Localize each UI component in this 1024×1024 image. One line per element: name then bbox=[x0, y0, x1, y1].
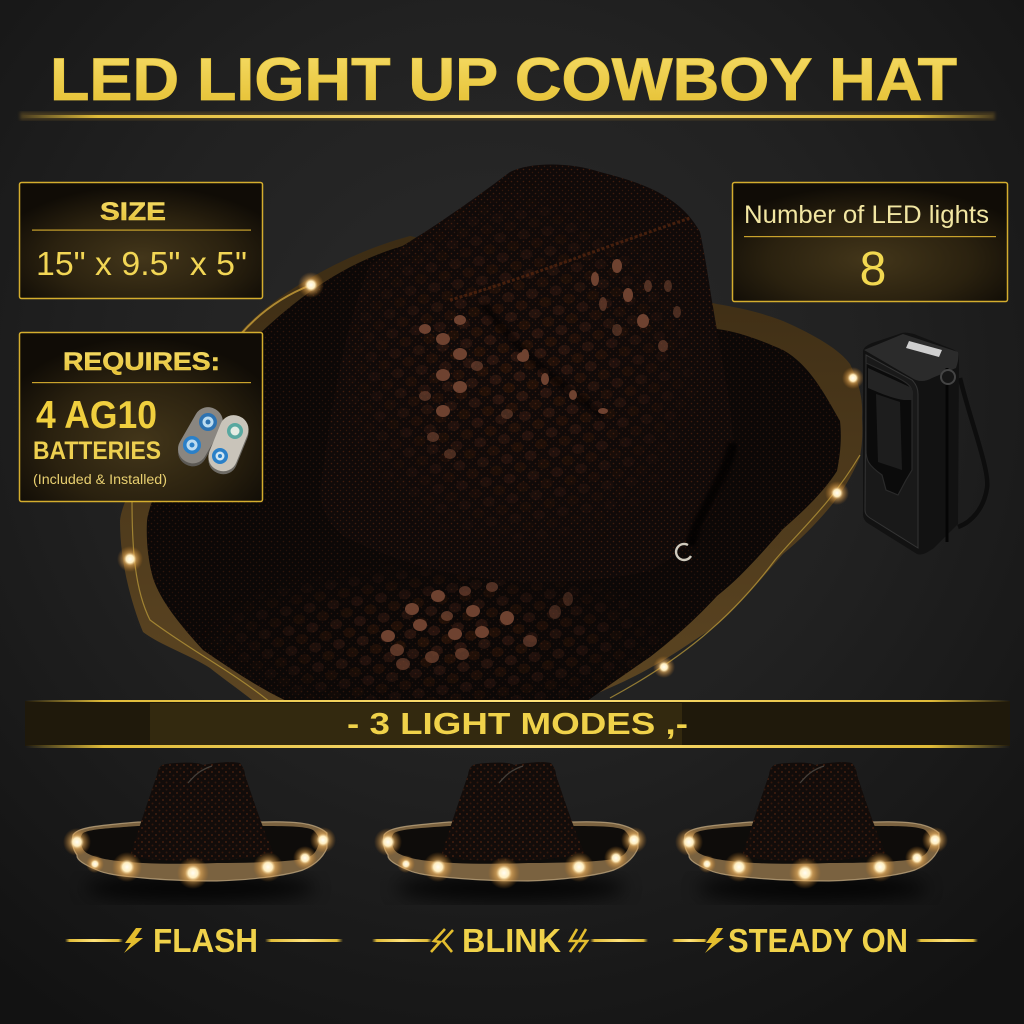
mode: blink hat bbox=[374, 762, 647, 902]
mode label: blink bbox=[372, 922, 648, 959]
mode label: blink: BLINK bbox=[462, 922, 561, 959]
panel: size bbox=[20, 182, 262, 298]
heading: size: SIZE bbox=[100, 198, 166, 226]
panel: requires bbox=[20, 332, 262, 502]
mode label: steady on: STEADY ON bbox=[728, 922, 908, 959]
mode: steady on hat bbox=[675, 762, 948, 902]
battery label: BATTERIES bbox=[33, 437, 161, 465]
hat brim bbox=[120, 236, 862, 704]
panel: number of LED lights bbox=[732, 182, 1008, 302]
bright sequins bbox=[381, 259, 681, 670]
icon: bolts right bbox=[570, 929, 587, 952]
hat crown bbox=[320, 164, 733, 582]
mode label: steady on bbox=[672, 922, 978, 959]
pack cable bbox=[958, 378, 987, 527]
mode label: flash bbox=[65, 922, 343, 959]
LED lights on main hat bbox=[117, 272, 864, 678]
battery count: 4 AG10 bbox=[36, 394, 157, 437]
icon: batteries bbox=[173, 402, 253, 479]
heading: 3 light modes: - 3 LIGHT MODES ,- bbox=[347, 706, 688, 741]
banner: 3 light modes bbox=[25, 700, 1010, 748]
hat eyelet bbox=[676, 544, 691, 560]
heading: number of LED lights: Number of LED lights bbox=[744, 201, 989, 229]
mode label: flash: FLASH bbox=[153, 922, 258, 959]
LED count: 8 bbox=[860, 243, 886, 296]
title: LED LIGHT UP COWBOY HAT bbox=[50, 46, 957, 113]
icon: bolts left bbox=[431, 929, 453, 952]
battery note: (Included & Installed) bbox=[33, 472, 167, 487]
battery pack bbox=[863, 333, 987, 555]
mode: flash hat bbox=[63, 762, 336, 902]
main hat illustration bbox=[120, 164, 862, 704]
heading: requires: REQUIRES: bbox=[63, 348, 220, 376]
icon: bolt bbox=[124, 928, 143, 953]
icon: bolt bbox=[705, 928, 724, 953]
size value: 15" x 9.5" x 5" bbox=[36, 245, 247, 282]
